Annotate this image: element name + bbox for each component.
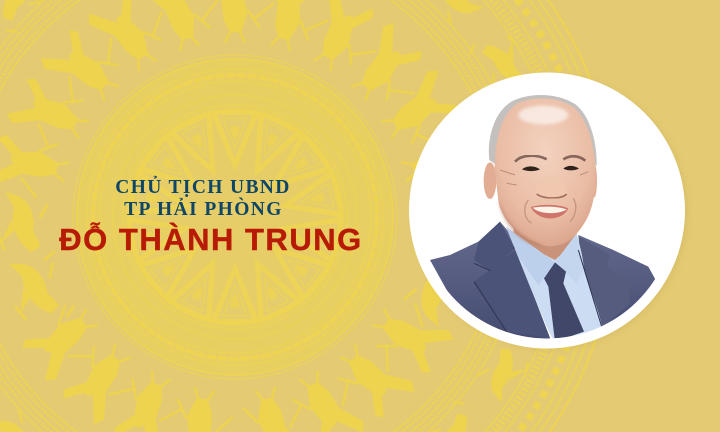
- portrait shadow: [414, 76, 686, 348]
- title line 2: TP HẢI PHÒNG: [124, 198, 283, 220]
- nose: [535, 177, 567, 198]
- eye creases: [500, 170, 588, 185]
- portrait person: [430, 95, 656, 347]
- hair: [489, 95, 597, 167]
- forehead highlight: [518, 106, 568, 124]
- brows: [515, 156, 585, 162]
- tie: [544, 262, 584, 342]
- shirt: [506, 227, 603, 347]
- collar left: [506, 227, 555, 285]
- name heading: ĐỖ THÀNH TRUNG: [59, 221, 363, 257]
- cheek shadow: [499, 203, 543, 246]
- suit: [430, 222, 656, 347]
- right lapel: [579, 237, 630, 327]
- neck: [513, 228, 576, 260]
- smile lines: [525, 198, 576, 223]
- left lapel: [474, 222, 550, 338]
- title line 1: CHỦ TỊCH UBND: [115, 176, 291, 198]
- ear right: [594, 164, 597, 198]
- ear left: [484, 162, 496, 199]
- face: [495, 98, 596, 246]
- eyes: [522, 166, 579, 171]
- mouth: [531, 205, 568, 218]
- collar right: [560, 234, 577, 256]
- portrait circle: [409, 72, 686, 348]
- title text block: [59, 176, 363, 257]
- portrait white disc: [409, 72, 685, 348]
